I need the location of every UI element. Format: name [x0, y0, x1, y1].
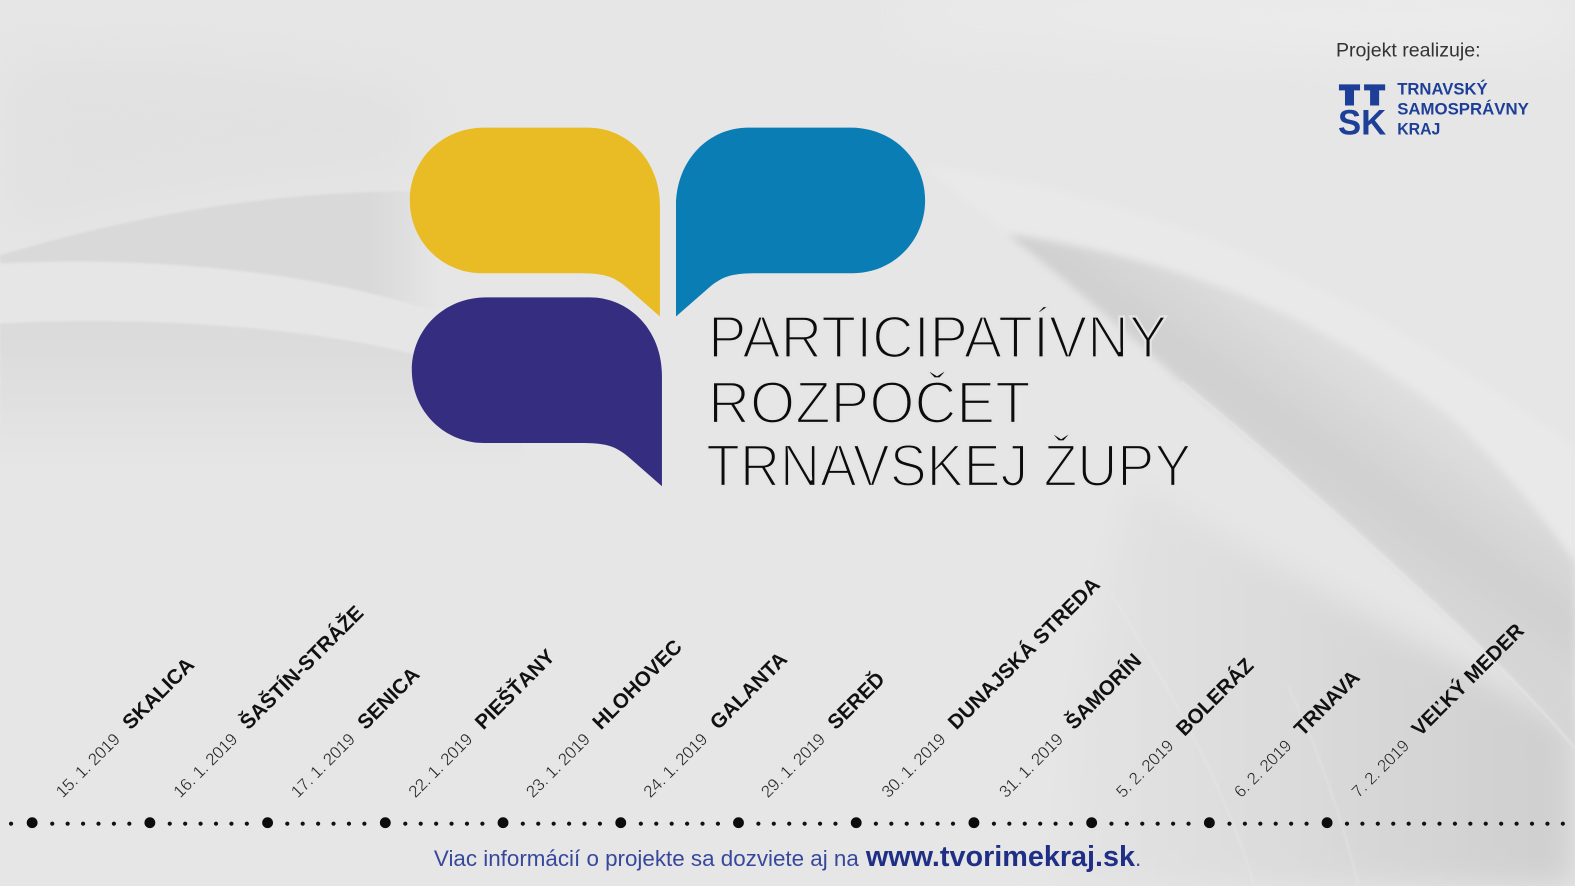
footer note: [434, 841, 1141, 873]
logo wordmark: [1397, 79, 1529, 139]
event: Veľký Meder: 7. 2. 2019VEĽKÝ MEDER: [1345, 618, 1529, 802]
logo mark: TT: [1339, 84, 1385, 106]
event: Sereď: 29. 1. 2019SEREĎ: [754, 667, 890, 802]
title: ROZPOČET: [708, 369, 1031, 436]
event: Skalica: 15. 1. 2019SKALICA: [50, 653, 199, 802]
event: Trnava: 6. 2. 2019TRNAVA: [1228, 666, 1365, 802]
credit label: Projekt realizuje:: [1336, 40, 1481, 61]
footer note: Viac informácií o projekte sa dozviete aj na: [434, 846, 859, 871]
event: Šaštín-Stráže: 16. 1. 2019ŠAŠTÍN-STRÁŽE: [167, 601, 368, 802]
event: Šamorín: 31. 1. 2019ŠAMORÍN: [993, 648, 1146, 802]
event: Dunajská Streda: 30. 1. 2019DUNAJSKÁ STREDA: [876, 573, 1105, 802]
footer note: www.tvorimekraj.sk: [865, 841, 1136, 873]
event: Boleráz: 5. 2. 2019BOLERÁZ: [1110, 654, 1258, 802]
event labels: [50, 573, 1529, 802]
logo wordmark: KRAJ: [1397, 120, 1440, 139]
icon: blue speech bubble: [676, 128, 925, 316]
logo wordmark: SAMOSPRÁVNY: [1397, 100, 1529, 119]
event: Piešťany: 22. 1. 2019PIEŠŤANY: [402, 644, 560, 802]
title: [706, 304, 1191, 499]
logo wordmark: TRNAVSKÝ: [1397, 79, 1488, 98]
icon: yellow speech bubble: [410, 128, 660, 316]
title: PARTICIPATÍVNY: [708, 304, 1167, 371]
event: Senica: 17. 1. 2019SENICA: [285, 663, 424, 802]
logo: Trnavský samosprávny kraj: [1338, 79, 1529, 143]
event: Hlohovec: 23. 1. 2019HLOHOVEC: [520, 635, 687, 802]
logo mark: SK: SK: [1338, 104, 1387, 143]
title: TRNAVSKEJ ŽUPY: [706, 432, 1191, 499]
timeline dots: [11, 817, 1567, 828]
footer note: .: [1135, 846, 1141, 871]
icon: purple speech bubble: [412, 297, 662, 486]
event: Galanta: 24. 1. 2019GALANTA: [638, 648, 792, 802]
